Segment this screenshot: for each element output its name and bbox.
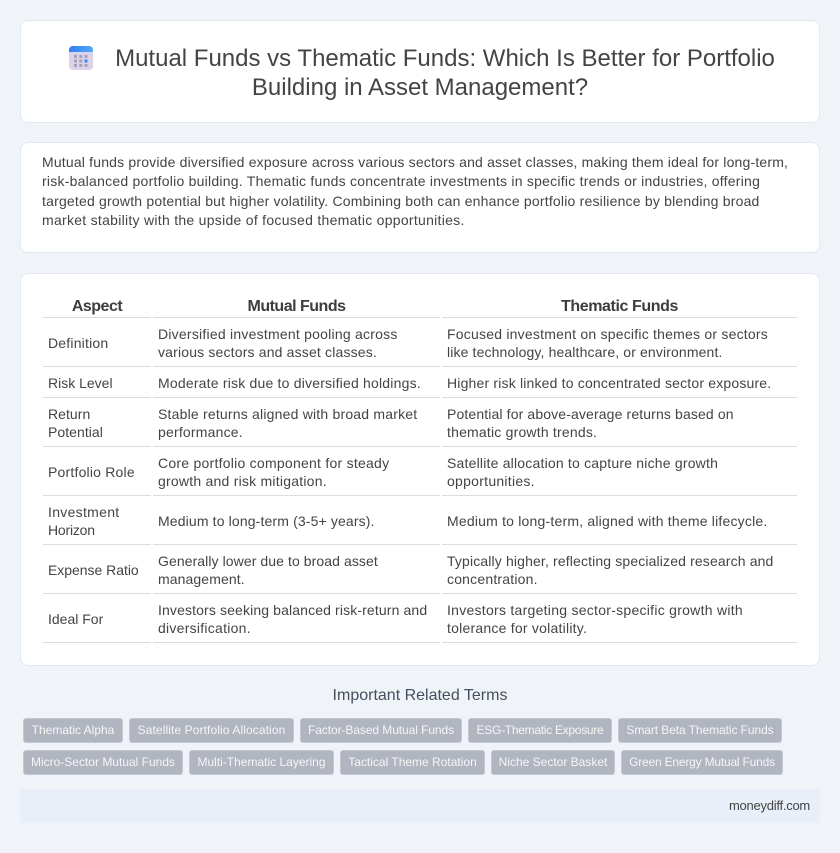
tags: related terms: Niche Sector Basket <box>499 755 607 769</box>
row: Definition: various sectors and asset classes. <box>158 344 377 360</box>
table header <box>72 298 678 315</box>
row: Portfolio Role: growth and risk mitigation. <box>158 473 327 489</box>
tags: related terms: ESG-Thematic Exposure <box>477 723 603 737</box>
row: Definition <box>43 317 797 360</box>
table header: Thematic Funds <box>561 298 678 315</box>
row: Ideal For: Investors seeking balanced risk-return and <box>158 602 427 618</box>
row: Definition: Diversified investment pooling across <box>158 326 398 342</box>
row: Return Potential: performance. <box>158 424 243 440</box>
row: Ideal For: diversification. <box>158 620 251 636</box>
row: Portfolio Role <box>43 446 797 489</box>
row: Investment Horizon: Medium to long-term (3-5+ years). <box>158 513 375 529</box>
title: Building in Asset Management? <box>252 74 588 101</box>
panel: introduction <box>20 142 820 253</box>
text block: introduction: Mutual funds provide diversified exposure across various sectors and asset classes, making them ideal for long-term, <box>42 154 788 170</box>
row: Expense Ratio: management. <box>158 571 245 587</box>
text block: introduction: market stability with the upside of focused thematic opportunities. <box>42 212 465 228</box>
text block: introduction <box>42 154 788 228</box>
tags: related terms: Green Energy Mutual Funds <box>629 755 775 769</box>
row: Risk Level <box>43 366 797 391</box>
row: Ideal For: Investors targeting sector-specific growth with <box>447 602 743 618</box>
panel: title card <box>20 20 820 123</box>
row: Expense Ratio: Generally lower due to broad asset <box>158 553 378 569</box>
heading: related terms: Important Related Terms <box>333 687 507 704</box>
tags: related terms: Multi-Thematic Layering <box>197 755 326 769</box>
table header: Aspect <box>72 298 122 315</box>
row: Expense Ratio <box>43 544 797 587</box>
icon: calendar grid <box>69 46 93 70</box>
table header: Mutual Funds <box>248 298 345 315</box>
row: Portfolio Role: Core portfolio component for steady <box>158 455 389 471</box>
tags: related terms: Thematic Alpha <box>32 723 114 737</box>
tags: related terms: Smart Beta Thematic Funds <box>626 723 774 737</box>
tags: related terms: Factor-Based Mutual Funds <box>308 723 454 737</box>
row: Ideal For: Ideal For <box>48 611 103 627</box>
row: Definition: like technology, healthcare, or environment. <box>447 344 722 360</box>
panel: comparison table <box>20 273 820 666</box>
row: Investment Horizon <box>43 495 797 538</box>
tags: related terms: Satellite Portfolio Allocation <box>138 723 285 737</box>
row: Return Potential: Potential for above-average returns based on <box>447 406 734 422</box>
row: Portfolio Role: Portfolio Role <box>48 464 135 480</box>
row: Return Potential: Return <box>48 406 90 422</box>
row: Ideal For <box>43 593 797 643</box>
row: Return Potential: Stable returns aligned with broad market <box>158 406 417 422</box>
row: Risk Level: Higher risk linked to concentrated sector exposure. <box>447 375 771 391</box>
text block: introduction: targeted growth potential but higher volatility. Combining both can enhance portfolio resilience by blending broad <box>42 193 760 209</box>
row: Ideal For: tolerance for volatility. <box>447 620 587 636</box>
row: Expense Ratio: Expense Ratio <box>48 562 139 578</box>
row: Risk Level: Risk Level <box>48 375 113 391</box>
row: Investment Horizon: Investment <box>48 504 119 520</box>
row: Definition: Definition <box>48 335 108 351</box>
row: Definition: Focused investment on specific themes or sectors <box>447 326 768 342</box>
row: Return Potential: thematic growth trends. <box>447 424 597 440</box>
row: Investment Horizon: Medium to long-term, aligned with theme lifecycle. <box>447 513 767 529</box>
row: Expense Ratio: Typically higher, reflecting specialized research and <box>447 553 773 569</box>
row: Risk Level: Moderate risk due to diversified holdings. <box>158 375 421 391</box>
tags: related terms: Tactical Theme Rotation <box>348 755 477 769</box>
footer: source: moneydiff.com <box>729 798 810 813</box>
tags: related terms <box>23 718 783 775</box>
row: Portfolio Role: opportunities. <box>447 473 535 489</box>
row: Return Potential: Potential <box>48 424 103 440</box>
row: Investment Horizon: Horizon <box>48 522 95 538</box>
title <box>115 45 775 101</box>
row: Return Potential <box>43 397 797 440</box>
tags: related terms: Micro-Sector Mutual Funds <box>31 755 175 769</box>
text block: introduction: risk-balanced portfolio building. Thematic funds concentrate investments in specific trends or industries, offering <box>42 173 760 189</box>
row: Expense Ratio: concentration. <box>447 571 538 587</box>
footer bar <box>20 789 820 823</box>
title: Mutual Funds vs Thematic Funds: Which Is Better for Portfolio <box>115 45 775 72</box>
row: Portfolio Role: Satellite allocation to capture niche growth <box>447 455 718 471</box>
